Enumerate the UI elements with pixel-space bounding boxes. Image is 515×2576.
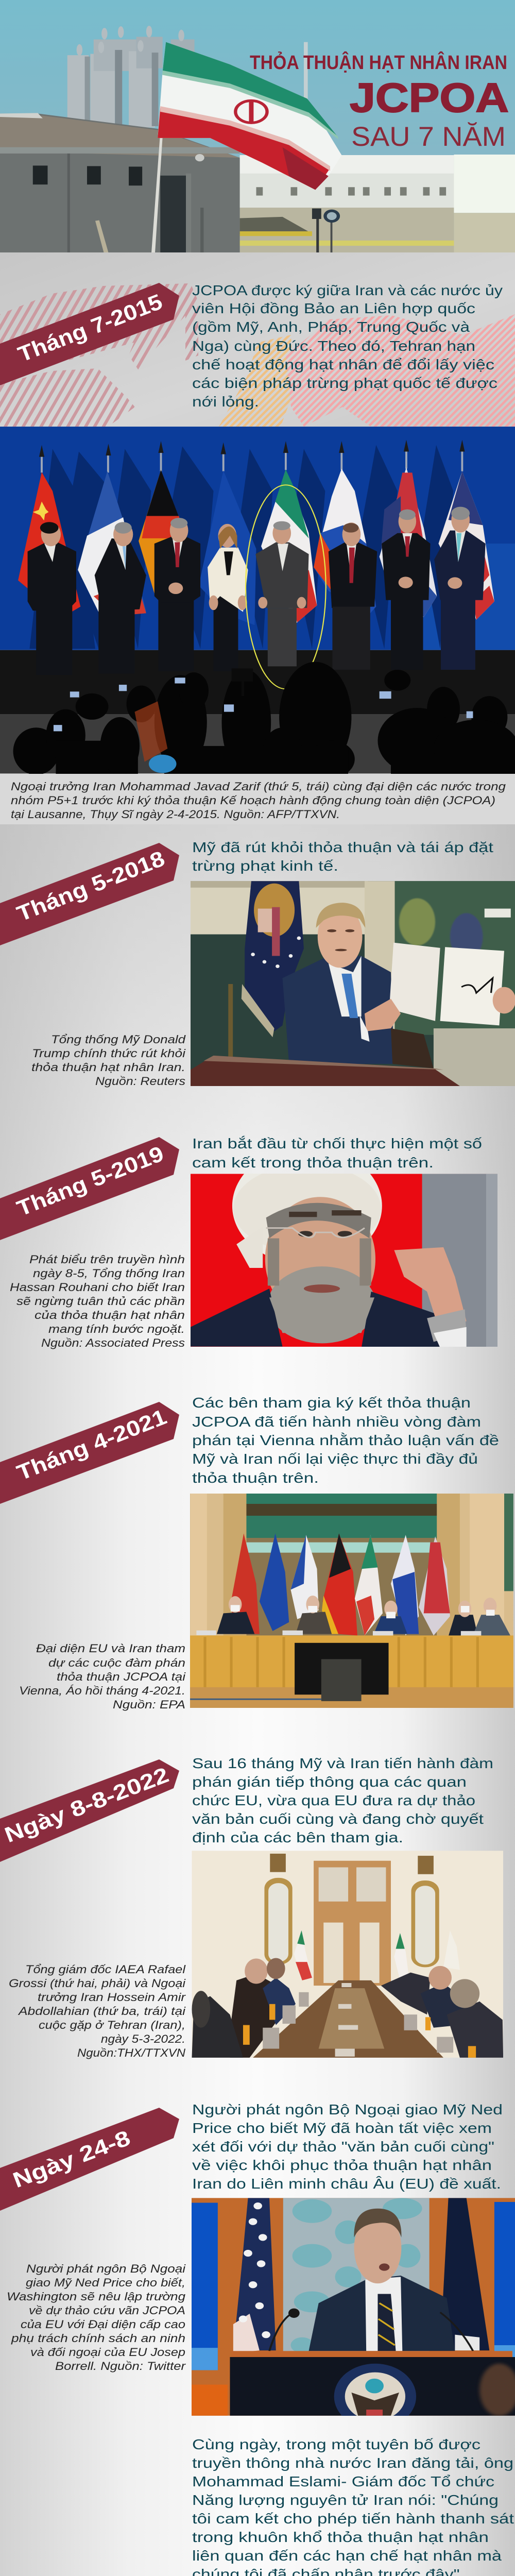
photo: Ned Price <box>192 2198 515 2429</box>
people <box>28 531 486 675</box>
photo: P5+1 group in Lausanne <box>0 427 515 777</box>
panel: July 2015 background with striped map <box>0 252 515 427</box>
people <box>217 1612 511 1636</box>
title JCPOA: JCPOA <box>350 75 509 121</box>
timeline background <box>0 824 515 2576</box>
text block: April 2021: JCPOA đã tiến hành nhiều vòng đàm <box>192 1414 481 1430</box>
title <box>250 51 509 152</box>
caption: Tehran meeting: Abdollahian (thứ ba, trái) tại <box>18 2005 186 2018</box>
caption: Ned Price: của EU với Đại diện cấp cao <box>21 2318 185 2331</box>
text block: 24 Aug <box>192 2102 503 2192</box>
caption: Rouhani: Hassan Rouhani cho biết Iran <box>10 1281 185 1294</box>
caption: Tehran meeting: Nguồn:THX/TTXVN <box>77 2046 185 2059</box>
text block: April 2021: Các bên tham gia ký kết thỏa thuận <box>192 1395 471 1411</box>
caption: Rouhani: Nguồn: Associated Press <box>41 1336 185 1349</box>
caption: Trump: Tổng thống Mỹ Donald <box>51 1033 186 1046</box>
caption: Ned Price: và đối ngoại của EU Josep <box>30 2346 185 2359</box>
flags <box>230 1533 260 1634</box>
flags <box>233 2198 276 2350</box>
text block: July 2015: JCPOA được ký giữa Iran và các nước ủy <box>192 282 503 298</box>
ribbon: Tháng 7-2015: Tháng 7-2015 <box>14 289 166 366</box>
caption: Rouhani: ngày 8-5, Tổng thống Iran <box>33 1267 185 1280</box>
Iran flag <box>158 42 341 190</box>
Trump <box>283 956 394 1064</box>
caption: Trump: Nguồn: Reuters <box>95 1075 185 1088</box>
table <box>190 1635 513 1688</box>
photo: Vienna talks <box>190 1494 513 1708</box>
text block: July 2015: các biện pháp trừng phạt quốc tế được <box>192 375 497 391</box>
flag pole <box>151 137 163 252</box>
Price <box>309 2276 455 2351</box>
text block: 8 Aug 2022 <box>192 1755 493 1845</box>
caption: Trump: Trump chính thức rút khỏi <box>32 1047 186 1060</box>
text block: Eslami statement: truyền thông nhà nước Iran đăng tải, ông <box>192 2455 513 2471</box>
caption: Vienna: thỏa thuận JCPOA tại <box>57 1670 186 1683</box>
white building <box>240 155 454 208</box>
text block: 8 Aug 2022: văn bản cuối cùng và đang chờ quyết <box>192 1811 484 1827</box>
text block: July 2015: viên Hội đồng Bảo an Liên hợp quốc <box>192 300 475 316</box>
subtitle: SAU 7 NĂM <box>351 122 506 152</box>
text block: Eslami statement <box>192 2436 514 2576</box>
text block: 8 Aug 2022: phán gián tiếp thông qua các quan <box>192 1774 467 1790</box>
text block: April 2021: Mỹ và Iran nối lại việc thực thi đầy đủ <box>192 1451 478 1467</box>
text block: May 2019: Iran bắt đầu từ chối thực hiện một số <box>192 1136 483 1151</box>
ribbon: Tháng 7-2015 <box>0 283 179 385</box>
text block: April 2021: phán tại Vienna nhằm thảo luận vấn đề <box>192 1432 499 1448</box>
text block: Eslami statement: liên quan đến các hạn chế hạt nhân mà <box>192 2548 502 2564</box>
text block: July 2015: (gồm Mỹ, Anh, Pháp, Trung Quốc và <box>192 319 470 335</box>
ribbon: Ngày 24-8 <box>0 2108 179 2211</box>
caption: Ned Price: về dự thảo cứu vãn JCPOA <box>29 2304 185 2317</box>
ribbon: Ngày 8-8-2022: Ngày 8-8-2022 <box>1 1762 172 1847</box>
caption: Trump <box>31 1033 186 1088</box>
text block: 8 Aug 2022: định của các bên tham gia. <box>192 1829 403 1845</box>
caption: Trump: thỏa thuận hạt nhân Iran. <box>31 1061 185 1074</box>
text block: May 2018: Mỹ đã rút khỏi thỏa thuận và tái áp đặt <box>192 839 493 855</box>
text block: Eslami statement: Năng lượng nguyên tử Iran nói: "Chúng <box>192 2492 499 2508</box>
text block: May 2018: trừng phạt kinh tế. <box>192 858 338 874</box>
ribbon: Tháng 5-2018 <box>0 843 179 945</box>
text block: July 2015: chế hoạt động hạt nhân để đổi lấy việc <box>192 357 494 372</box>
text block: Eslami statement: tôi cam kết cho phép tiến hành thanh sát <box>192 2511 514 2527</box>
ribbon: Tháng 4-2021: Tháng 4-2021 <box>13 1404 170 1485</box>
crowd <box>13 662 515 777</box>
caption: Ned Price: Người phát ngôn Bộ Ngoại <box>26 2262 186 2275</box>
caption: Vienna <box>19 1642 186 1711</box>
caption: Vienna: Nguồn: EPA <box>113 1698 185 1711</box>
ribbon: Tháng 5-2018: Tháng 5-2018 <box>13 846 168 926</box>
sign <box>316 210 319 252</box>
text block: 8 Aug 2022: Sau 16 tháng Mỹ và Iran tiến hành đàm <box>192 1755 493 1771</box>
caption: Vienna: Đại diện EU và Iran tham <box>36 1642 185 1655</box>
text block: 24 Aug: Người phát ngôn Bộ Ngoại giao Mỹ Ned <box>192 2102 503 2117</box>
caption: Rouhani: mang tính bước ngoặt. <box>48 1323 185 1335</box>
text block: May 2018 <box>192 839 493 874</box>
hero banner <box>0 0 515 252</box>
text block: 8 Aug 2022: chức EU, vừa qua EU đưa ra dự thảo <box>192 1792 475 1808</box>
text block: July 2015 <box>192 282 503 410</box>
text block: May 2019 <box>192 1136 483 1171</box>
caption: Vienna: dự các cuộc đàm phán <box>48 1656 185 1669</box>
photo: Tehran meeting <box>192 1851 503 2058</box>
text block: 24 Aug: Iran do Liên minh châu Âu (EU) đề xuất. <box>192 2176 501 2192</box>
text block: April 2021 <box>192 1395 499 1486</box>
caption: Ned Price <box>7 2262 186 2372</box>
caption: Rouhani <box>10 1253 185 1349</box>
grey building <box>0 113 240 252</box>
people <box>230 1977 275 2058</box>
caption: Rouhani: của thỏa thuận hạt nhân <box>35 1309 185 1321</box>
text block: July 2015: Nga) cùng Đức. Theo đó, Tehran hạn <box>192 338 475 354</box>
caption: Tehran meeting: cuộc gặp ở Tehran (Iran), <box>39 2019 185 2031</box>
caption: Vienna: Vienna, Áo hồi tháng 4-2021. <box>19 1684 185 1697</box>
ellipse highlight <box>246 485 326 689</box>
hero photo: Iran nuclear plant and flag <box>0 0 515 252</box>
desk <box>191 1056 460 1086</box>
caption: Rouhani: sẽ ngừng tuân thủ các phần <box>16 1295 185 1308</box>
ribbon: Tháng 4-2021 <box>0 1402 179 1504</box>
text block: Eslami statement: Cùng ngày, trong một tuyên bố được <box>192 2436 480 2452</box>
text block: 24 Aug: Price cho biết Mỹ đã hoàn tất việc xem <box>192 2120 492 2136</box>
text block: 24 Aug: xét đối với dự thảo "văn bản cuối cùng" <box>192 2139 494 2155</box>
caption: Tehran meeting: ngày 5-3-2022. <box>101 2032 185 2045</box>
flags <box>18 472 80 617</box>
jugs <box>263 1992 453 2053</box>
document <box>389 943 440 1021</box>
caption band: Lausanne photo <box>0 774 515 824</box>
ribbon: Tháng 5-2019 <box>0 1137 179 1240</box>
text block: April 2021: thỏa thuận trên. <box>192 1470 319 1486</box>
caption band: Lausanne photo: tại Lausanne, Thụy Sĩ ngày 2-4-2015. Nguồn: AFP/TTXVN. <box>11 808 340 821</box>
text block: 24 Aug: về việc khôi phục thỏa thuận hạt nhân <box>192 2157 492 2173</box>
ribbon: Tháng 5-2019: Tháng 5-2019 <box>13 1141 167 1221</box>
ribbon: Ngày 8-8-2022 <box>0 1759 179 1862</box>
text block: May 2019: cam kết trong thỏa thuận trên. <box>192 1155 434 1171</box>
caption: Rouhani: Phát biểu trên truyền hình <box>29 1253 185 1266</box>
caption: Ned Price: phụ trách chính sách an ninh <box>11 2332 185 2345</box>
caption band: Lausanne photo: nhóm P5+1 trước khi ký thỏa thuận Kế hoạch hành động chung toàn diện (JCPOA) <box>11 794 495 807</box>
table <box>253 1980 443 2058</box>
text block: Eslami statement: Mohammad Eslami- Giám đốc Tổ chức <box>192 2473 494 2489</box>
caption: Ned Price: Washington sẽ nêu lập trường <box>7 2290 186 2303</box>
text block: Eslami statement: trong khuôn khổ thỏa thuận hạt nhân <box>192 2529 489 2545</box>
caption band: Lausanne photo: Ngoại trưởng Iran Mohammad Javad Zarif (thứ 5, trái) cùng đại diện các nước trong <box>11 780 506 793</box>
floor <box>0 650 515 715</box>
caption: Ned Price: giao Mỹ Ned Price cho biết, <box>26 2276 185 2289</box>
caption: Ned Price: Borrell. Nguồn: Twitter <box>55 2360 186 2372</box>
caption: Tehran meeting: trưởng Iran Hossein Amir <box>38 1991 186 2004</box>
photo: Trump signing <box>191 881 515 1086</box>
caption: Tehran meeting: Grossi (thứ hai, phải) và Ngoại <box>9 1977 186 1990</box>
podium <box>232 2351 512 2358</box>
text block: July 2015: nới lỏng. <box>192 394 259 410</box>
caption: Tehran meeting: Tổng giám đốc IAEA Rafael <box>25 1963 186 1976</box>
photo: Rouhani <box>191 1174 497 1347</box>
caption: Tehran meeting <box>9 1963 186 2059</box>
ribbon: Ngày 24-8: Ngày 24-8 <box>9 2126 133 2192</box>
